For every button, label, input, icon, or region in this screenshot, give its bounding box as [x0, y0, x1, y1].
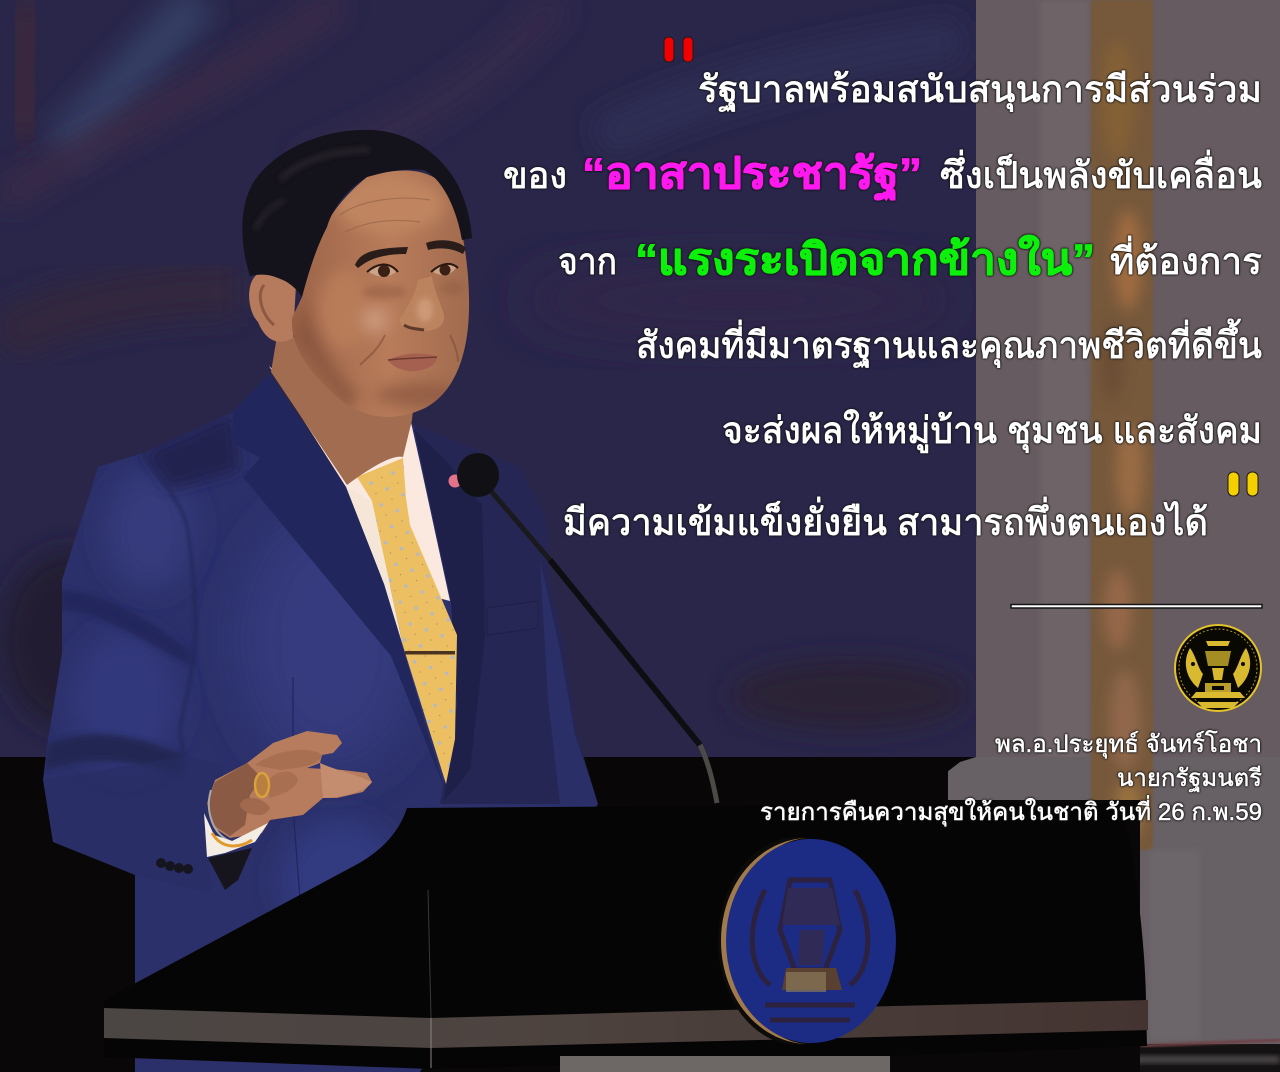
quote text: จาก — [558, 241, 617, 282]
opening quote mark — [664, 37, 693, 62]
speaker figure — [30, 130, 717, 1072]
quote text: “แรงระเบิดจากข้างใน” — [635, 234, 1095, 284]
lapel pin — [448, 474, 462, 488]
brows — [355, 240, 466, 268]
attribution — [760, 730, 1262, 827]
divider — [1011, 604, 1262, 608]
podium band — [104, 1000, 1148, 1048]
nose — [400, 276, 444, 331]
dark stage base — [0, 757, 976, 810]
icon: government seal — [1175, 625, 1261, 711]
left lapel — [233, 374, 444, 787]
gesturing hand — [207, 731, 372, 842]
attribution: พล.อ.ประยุทธ์ จันทร์โอชา — [995, 730, 1262, 759]
quote text: ของ — [503, 155, 567, 196]
microphone — [457, 453, 717, 803]
quote text: สังคมที่มีมาตรฐานและคุณภาพชีวิตที่ดีขึ้น — [636, 318, 1262, 368]
ear — [249, 272, 296, 342]
podium seal — [718, 837, 896, 1045]
right chest — [414, 425, 598, 804]
closing quote mark — [1228, 472, 1258, 496]
quote text: จะส่งผลให้หมู่บ้าน ชุมชน และสังคม — [722, 409, 1262, 453]
mouth — [388, 354, 437, 371]
quote text — [503, 69, 1262, 543]
podium — [104, 803, 1148, 1072]
eyes — [367, 264, 458, 277]
quote text: ที่ต้องการ — [1110, 235, 1262, 282]
floor at lower right — [1130, 1040, 1280, 1072]
shirt collar and front — [269, 366, 450, 601]
right lapel — [414, 429, 485, 801]
attribution: นายกรัฐมนตรี — [1117, 765, 1262, 792]
face — [292, 170, 470, 417]
jacket body — [43, 412, 598, 1072]
gold tie — [357, 458, 457, 784]
quote text: มีความเข้มแข็งยั่งยืน สามารถพึ่งตนเองได้ — [563, 496, 1208, 543]
quote text: ซึ่งเป็นพลังขับเคลื่อน — [940, 149, 1262, 196]
neck — [271, 330, 415, 485]
hair — [242, 130, 472, 297]
LED screen backdrop — [0, 0, 976, 757]
attribution: รายการคืนความสุขให้คนในชาติ วันที่ 26 ก.พ.59 — [760, 795, 1262, 827]
quote text: รัฐบาลพร้อมสนับสนุนการมีส่วนร่วม — [698, 69, 1262, 112]
cuff buttons — [156, 858, 193, 874]
metal base — [560, 1056, 890, 1072]
sleeve opening lining — [208, 848, 252, 890]
shirt cuff — [204, 813, 268, 857]
wall and gilded column — [948, 0, 1280, 1072]
quote text: “อาสาประชารัฐ” — [582, 150, 922, 201]
